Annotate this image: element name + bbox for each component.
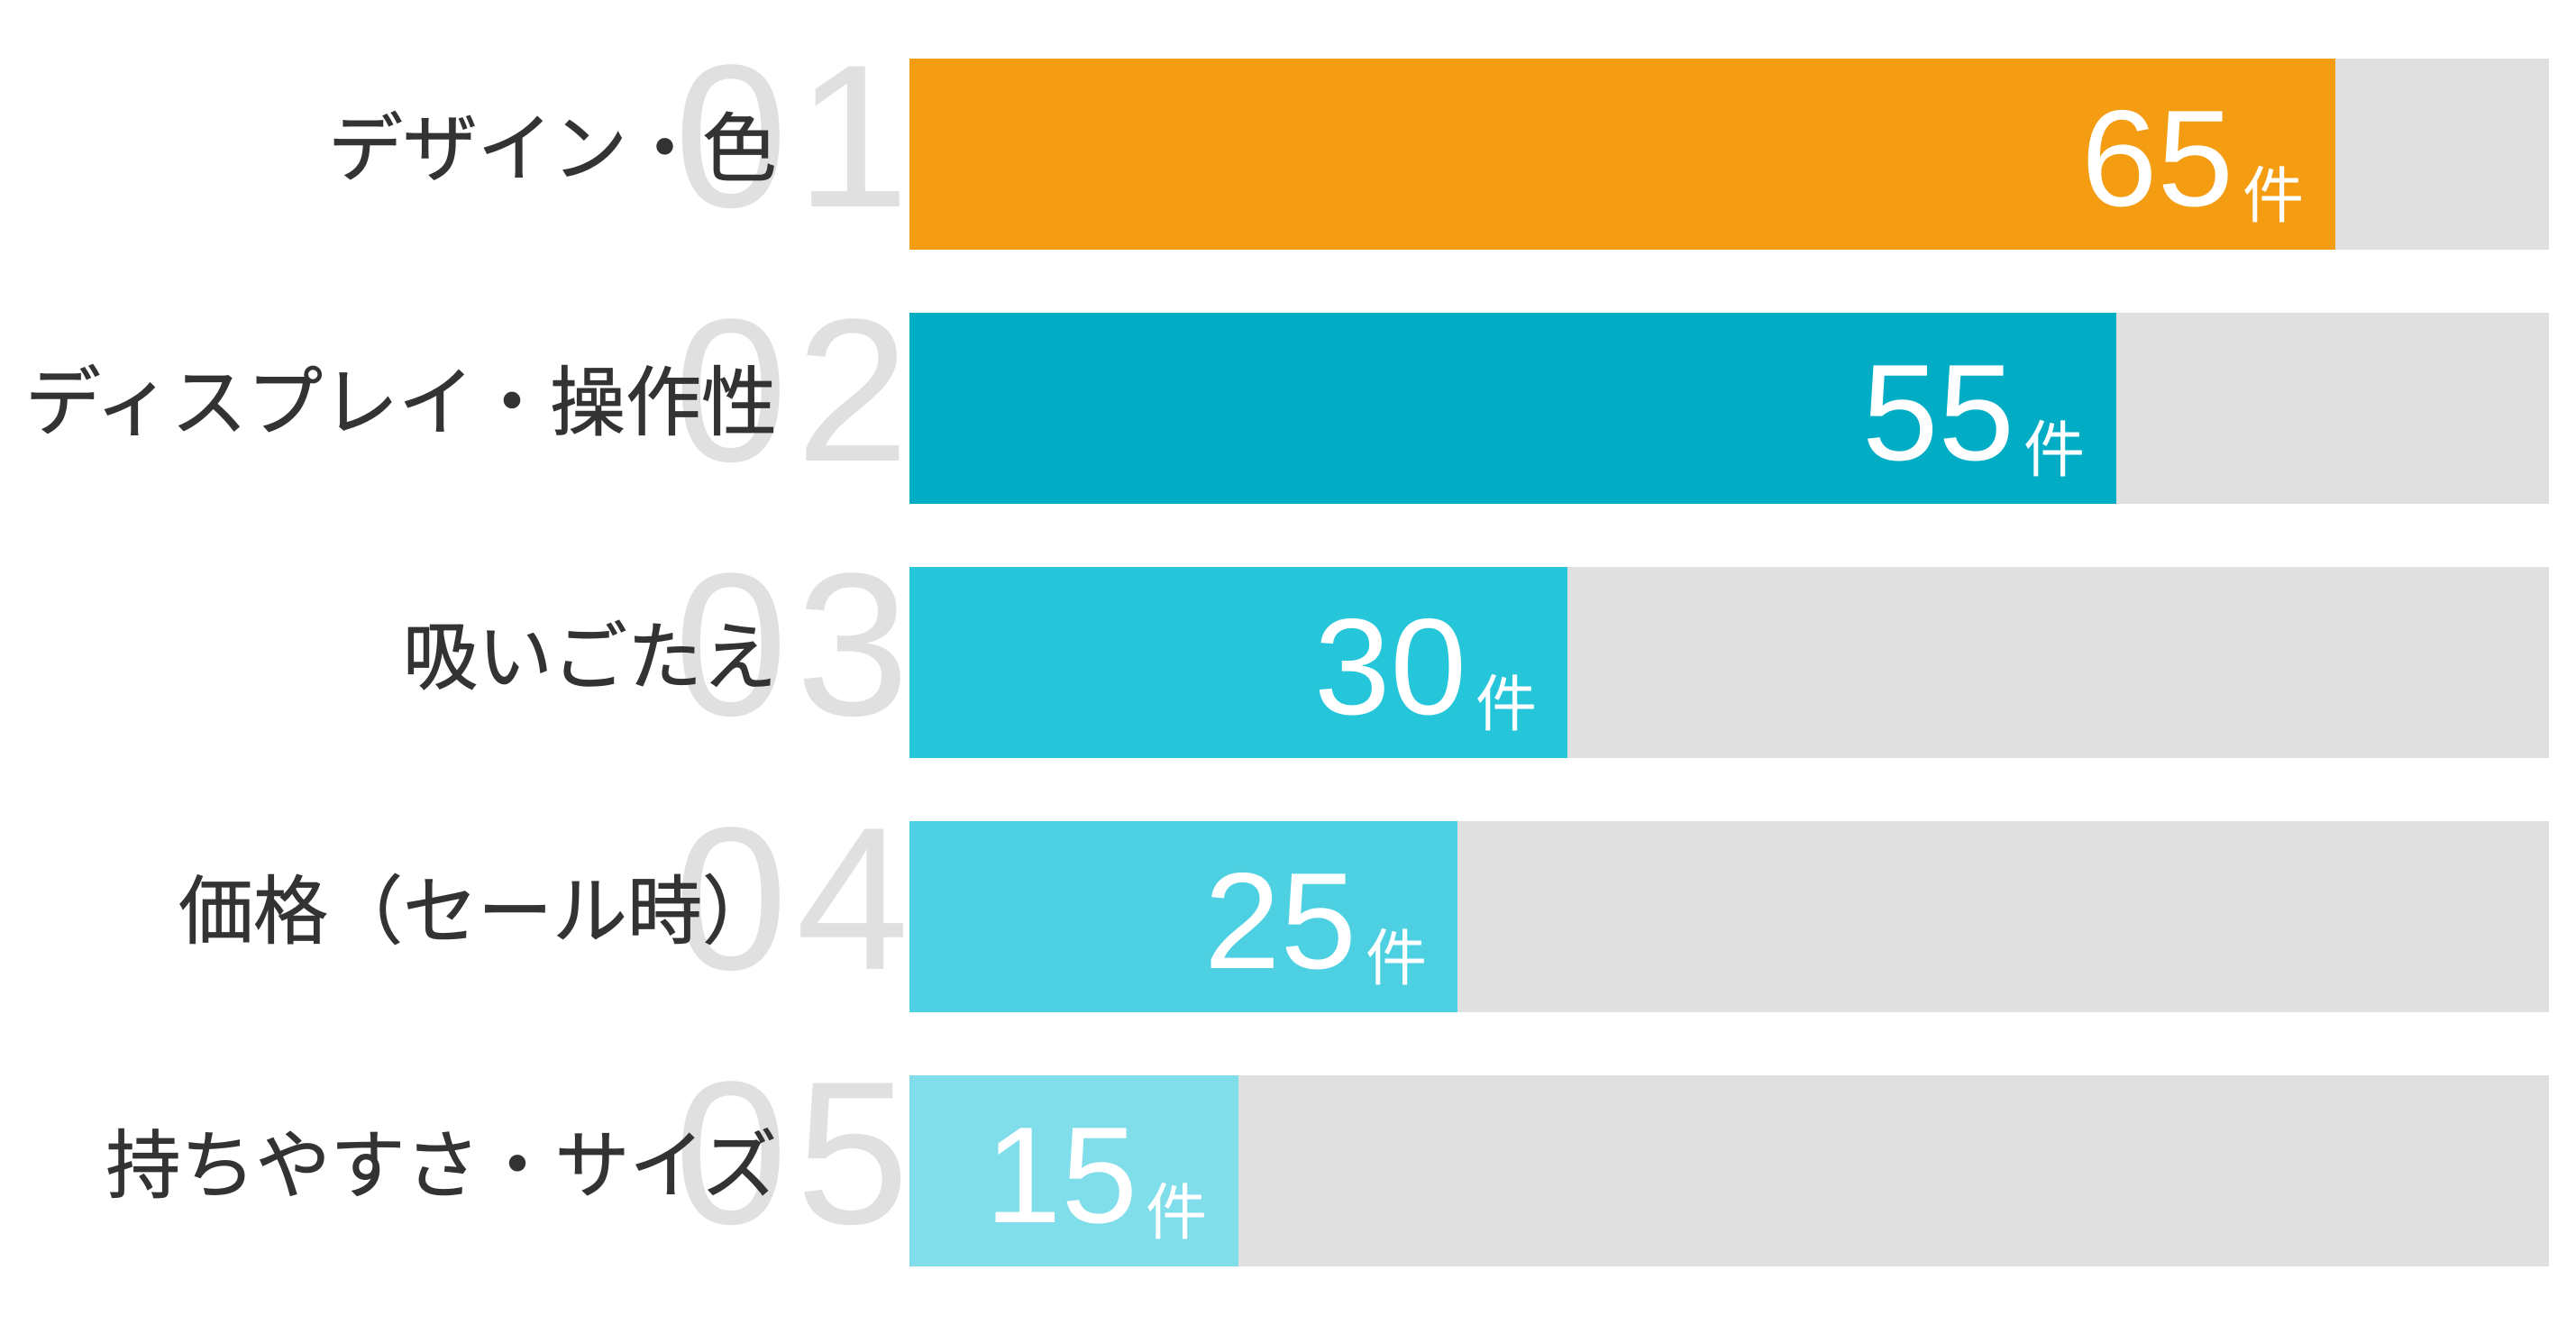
rank number 01: 01 (674, 22, 909, 250)
bar 02: 55 (909, 313, 2116, 504)
rank number 02: 02 (674, 276, 909, 504)
row 04: price (178, 784, 2549, 1012)
unit: 件 (2243, 162, 2304, 231)
bar 03: 30 (909, 567, 1567, 758)
bar 05: 15 (909, 1075, 1238, 1266)
row 03: smoothness of draw (403, 530, 2549, 758)
track 03 (909, 567, 2549, 758)
value 55: 55 (1862, 336, 2014, 489)
track 02 (909, 313, 2549, 504)
track 04 (909, 821, 2549, 1012)
unit: 件 (2023, 416, 2085, 485)
value 30: 30 (1314, 590, 1466, 744)
track 01 (909, 59, 2549, 250)
label: ease of holding and size: 持ちやすさ・サイズ (105, 1124, 777, 1208)
value 15: 15 (985, 1099, 1137, 1252)
unit: 件 (1366, 925, 1427, 993)
label: design and colour: デザイン・色 (328, 107, 777, 191)
bar 04: 25 (909, 821, 1457, 1012)
label: smoothness of draw: 吸いごたえ (403, 616, 777, 699)
rank number 03: 03 (674, 530, 909, 758)
row 02: display and operability (25, 276, 2549, 504)
unit: 件 (1146, 1179, 1207, 1247)
rank number 04: 04 (674, 784, 909, 1012)
row 01: design and colour (328, 22, 2549, 250)
value 25: 25 (1204, 845, 1357, 998)
bar 01: 65 (909, 59, 2335, 250)
label: price: 価格（セール時） (178, 870, 777, 954)
label: display and operability: ディスプレイ・操作性 (25, 361, 777, 445)
track 05 (909, 1075, 2549, 1266)
value 65: 65 (2081, 82, 2233, 235)
row 05: ease of holding and size (105, 1038, 2549, 1266)
unit: 件 (1475, 671, 1537, 739)
rank number 05: 05 (674, 1038, 909, 1266)
